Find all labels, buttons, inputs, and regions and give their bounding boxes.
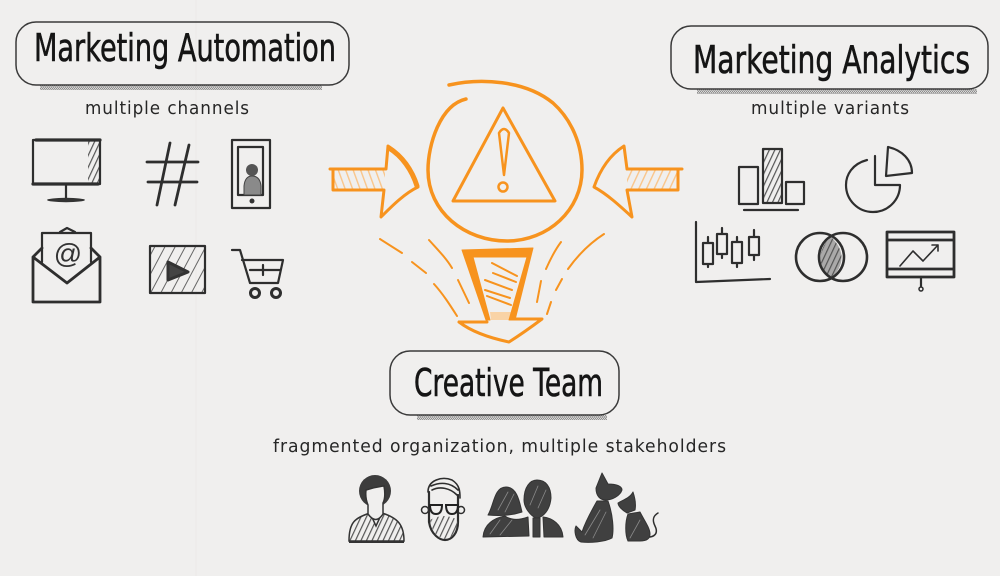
icon: shopping cart: [232, 250, 283, 298]
icons: stakeholders: [349, 473, 658, 542]
subheading: multiple variants: multiple variants: [751, 98, 910, 119]
subheading: multiple channels: multiple channels: [85, 98, 250, 119]
icon: phone with person: [232, 140, 270, 208]
icons: analytics variants: [696, 147, 954, 291]
icon: candlestick chart: [696, 222, 770, 282]
icon: pie chart: [846, 147, 912, 212]
icon: warning triangle: [453, 108, 555, 201]
warning circle: [428, 81, 582, 241]
icon: woman: [349, 475, 404, 542]
icon: video player: [150, 246, 205, 293]
icon: bearded man: [422, 478, 464, 540]
icons: marketing channels: [33, 140, 283, 302]
arrow: right into warning: [594, 146, 682, 217]
heading: Marketing Automation: Marketing Automation: [34, 26, 336, 70]
arrow: down to Creative Team: [459, 248, 542, 342]
icon: dog and cat: [575, 473, 658, 542]
heading: Creative Team: [390, 351, 619, 420]
arrow: left into warning: [330, 146, 418, 217]
subheading: fragmented organization: fragmented organization, multiple stakeholders: [273, 436, 727, 457]
heading: Marketing Automation: [16, 22, 349, 90]
icon: venn diagram: [796, 233, 867, 281]
icon: hashtag: [147, 143, 198, 205]
icon: bar chart: [739, 149, 804, 210]
icon: email envelope: @: [54, 238, 82, 269]
icon: monitor: [33, 140, 100, 202]
heading: Creative Team: Creative Team: [414, 361, 603, 405]
icon: exclamation mark: [498, 129, 509, 192]
icon: couple: [483, 480, 563, 537]
heading: Marketing Analytics: [671, 26, 988, 94]
icon: email envelope: [33, 228, 100, 302]
motion lines: [380, 234, 604, 316]
icon: presentation board: [887, 232, 954, 291]
